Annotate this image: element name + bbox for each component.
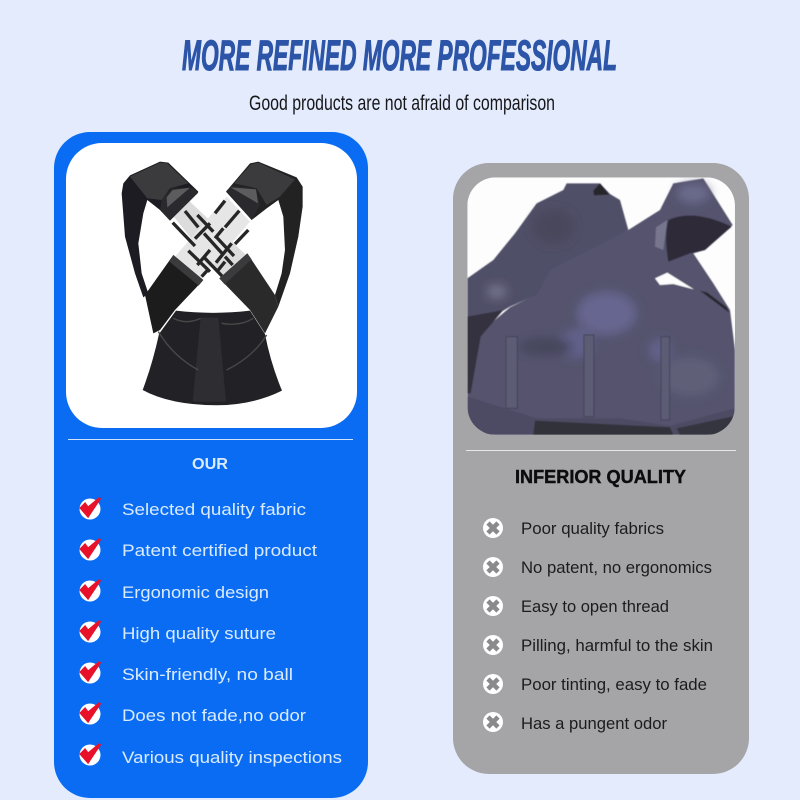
left shoulder strap	[122, 162, 198, 297]
check item 7: Various quality inspections	[122, 748, 342, 767]
check item 3	[80, 580, 269, 602]
vest body	[467, 178, 735, 435]
cross item 5: Poor tinting, easy to fade	[521, 676, 707, 694]
check item 6	[80, 703, 306, 725]
subtitle: Good products are not afraid of comparison	[249, 91, 555, 115]
panel: our product	[54, 132, 368, 798]
left underside shadow	[467, 310, 503, 393]
cross item 2: No patent, no ergonomics	[521, 559, 712, 577]
check item 2: Patent certified product	[122, 541, 317, 560]
photo: inferior vest	[467, 177, 735, 435]
check item 2	[80, 539, 317, 560]
hook and loop band	[467, 397, 735, 435]
list: inferior drawbacks	[483, 518, 713, 733]
list: our benefits	[80, 498, 342, 767]
right shoulder strap	[226, 162, 303, 307]
check item 5: Skin-friendly, no ball	[122, 665, 293, 684]
check item 7	[80, 744, 342, 767]
check item 3: Ergonomic design	[122, 583, 269, 602]
cross item 6	[483, 712, 667, 733]
check item 4	[80, 621, 276, 643]
left strap	[467, 183, 628, 343]
cross item 1	[483, 518, 664, 538]
divider	[68, 439, 353, 440]
heading: inferior quality: INFERIOR QUALITY	[515, 467, 686, 487]
check item 1: Selected quality fabric	[122, 500, 307, 519]
heading: our: OUR	[192, 456, 228, 473]
panel: inferior quality	[453, 163, 749, 774]
check item 1	[80, 498, 307, 520]
cross item 3: Easy to open thread	[521, 598, 669, 616]
lower straps	[145, 255, 203, 333]
cross item 4: Pilling, harmful to the skin	[521, 637, 713, 655]
elastic crossing	[173, 197, 250, 278]
cross item 6: Has a pungent odor	[521, 715, 667, 733]
check item 4: High quality suture	[122, 624, 276, 643]
cross item 1: Poor quality fabrics	[521, 520, 664, 538]
shoulder pads	[130, 163, 188, 200]
check item 6: Does not fade,no odor	[122, 706, 306, 725]
check item 5	[80, 662, 293, 684]
waist belt	[143, 311, 282, 405]
inside of shoulder	[666, 215, 732, 262]
divider	[466, 450, 736, 451]
icon: posture corrector vest	[122, 162, 303, 405]
seam strips	[506, 335, 670, 420]
lighter mottling	[487, 183, 720, 397]
product photo card	[66, 143, 357, 428]
buckles	[160, 188, 198, 221]
